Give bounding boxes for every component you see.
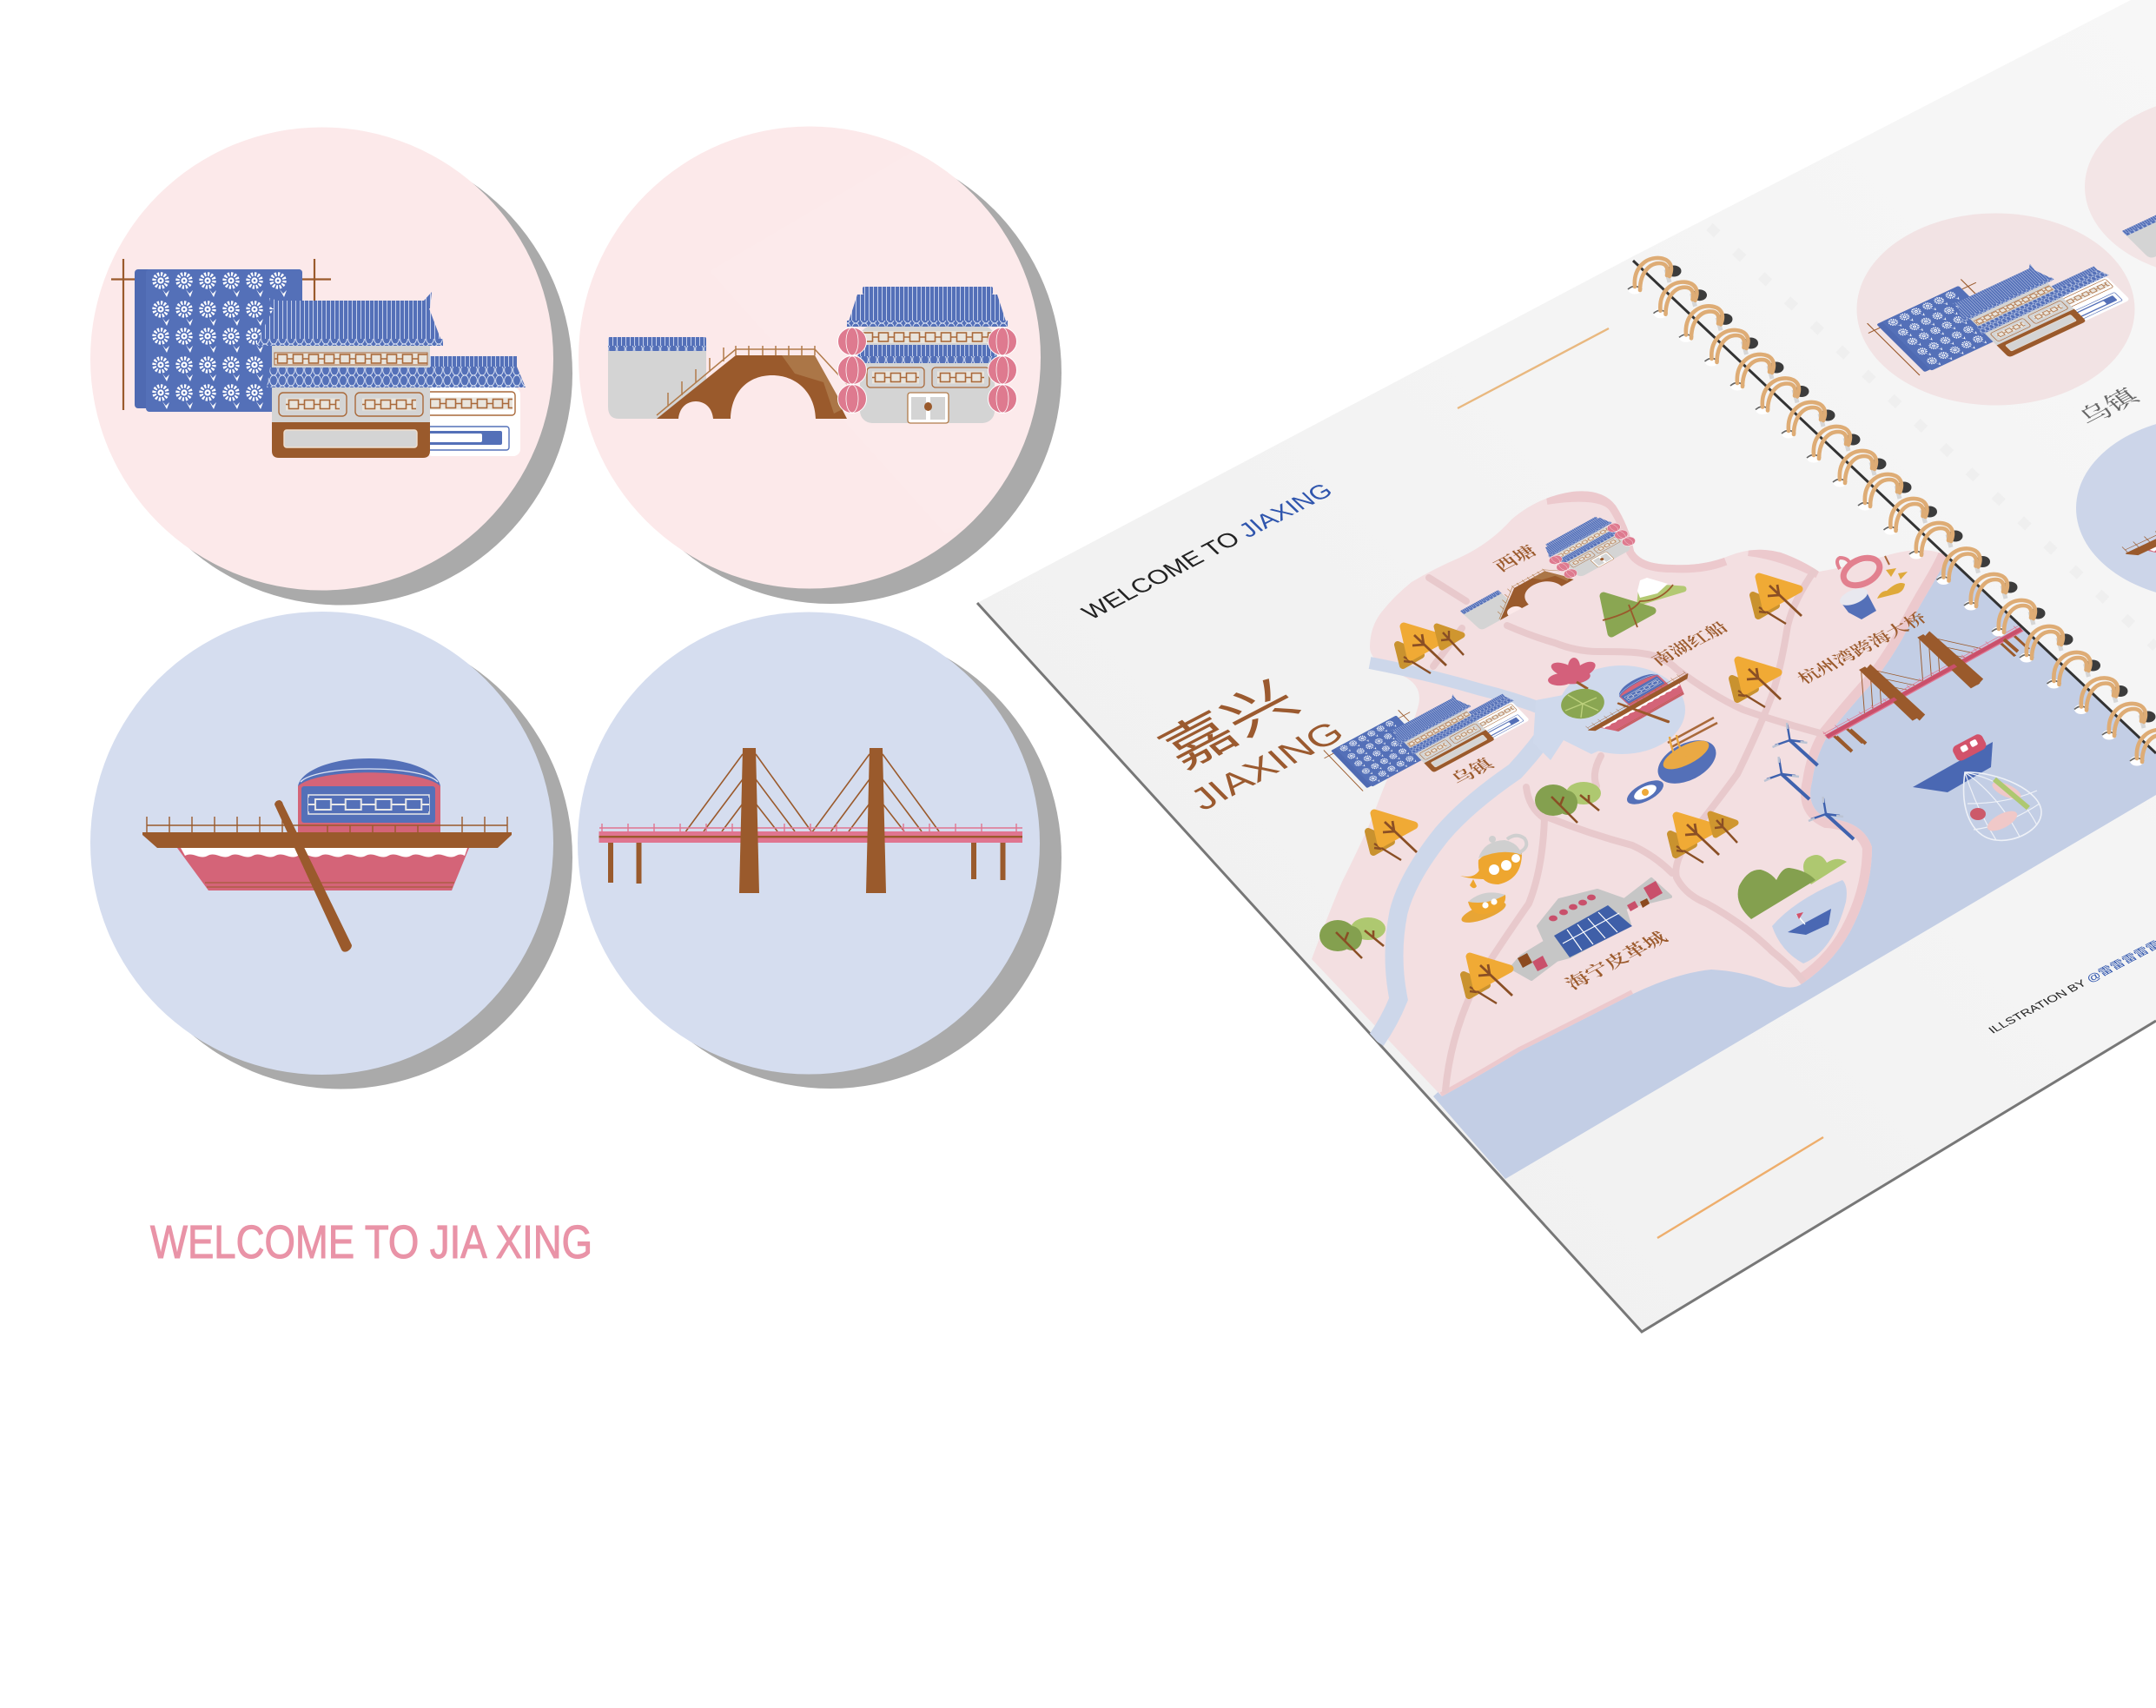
page disc pink 2 xyxy=(2085,106,2156,268)
heading: Jiaxing latin: JIAXING xyxy=(1181,715,1352,817)
icon: spade and sand xyxy=(1877,556,1908,599)
page disc pink xyxy=(1857,214,2135,405)
orange rule top xyxy=(1458,328,1609,408)
icon: cable-stayed bridge xyxy=(599,748,1022,893)
coaster shadow xyxy=(109,142,572,605)
page disc blue xyxy=(2076,416,2156,600)
label: Hangzhou Bay bridge: 杭州湾跨海大桥 xyxy=(1794,609,1931,687)
icon: fried egg plate xyxy=(1627,780,1663,804)
binding spine xyxy=(1633,261,2156,753)
roads xyxy=(1429,569,1827,1090)
icon: red boat xyxy=(142,758,512,952)
coast bands xyxy=(1442,494,1948,1096)
icon: sailboat xyxy=(1788,909,1831,935)
icon: Xitang map illustration xyxy=(1460,516,1636,629)
coaster: Nanhu red boat xyxy=(90,612,572,1089)
sea xyxy=(1433,556,2156,1179)
spiral binding xyxy=(1628,258,2156,792)
icon: teacup xyxy=(1461,879,1506,923)
icon: bridge map illustration xyxy=(1822,626,2030,751)
coaster disc xyxy=(579,127,1041,589)
icon: Wuzhen cloth and buildings xyxy=(111,259,526,458)
rivers and lake xyxy=(1370,663,1685,1041)
binding rings xyxy=(1628,258,2156,792)
heading: Jiaxing in Chinese: 嘉兴 xyxy=(1147,672,1312,778)
light reflection xyxy=(710,148,1068,533)
south lake xyxy=(1772,880,1847,963)
right page: Wuzhen circle xyxy=(1857,96,2156,600)
icon: bucket xyxy=(1840,589,1876,619)
mini Wuzhen illustration xyxy=(1862,231,2133,394)
trees: autumn xyxy=(1368,577,1802,1003)
icon: Xitang house, bridge and lanterns xyxy=(608,287,1016,423)
land xyxy=(1312,491,1948,1096)
icon: zongzi xyxy=(1603,578,1683,633)
icon: swim ring and flamingo xyxy=(1835,554,1883,589)
orange rule bottom xyxy=(1657,1137,1823,1238)
icon: teapot xyxy=(1460,836,1526,884)
icon: green hills xyxy=(1738,855,1847,919)
icon: fishing net with catch xyxy=(1964,772,2041,840)
label: Haining leather city: 海宁皮革城 xyxy=(1562,929,1671,993)
icon: Haining leather city xyxy=(1511,879,1670,979)
label: Xitang: 西塘 xyxy=(1490,542,1541,575)
bridge: thick towers and deck xyxy=(1827,629,2021,751)
ring imprints xyxy=(1710,227,2156,647)
icon: noodle bowl xyxy=(1657,716,1718,784)
paper edge xyxy=(977,603,2156,1332)
icon: Wuzhen map illustration xyxy=(1319,665,1532,806)
icon: fishing boat xyxy=(1913,732,1993,792)
coaster shadow xyxy=(109,626,572,1089)
paper sheet xyxy=(977,0,2156,1332)
icon: lotus xyxy=(1547,658,1606,721)
coaster: Wuzhen xyxy=(90,127,572,605)
caption: WELCOME TO JIA XING xyxy=(150,1216,592,1268)
coaster shadow xyxy=(599,626,1061,1089)
icon: map boat xyxy=(1585,671,1689,732)
mini Xitang illustration xyxy=(2122,215,2156,257)
label: Wuzhen: 乌镇 xyxy=(2073,382,2146,430)
label: Wuzhen: 乌镇 xyxy=(1447,754,1499,788)
label: Nanhu red boat: 南湖红船 xyxy=(1648,619,1732,669)
coaster: Hangzhou Bay bridge xyxy=(578,612,1061,1089)
coaster: Xitang xyxy=(579,127,1068,604)
map xyxy=(1312,491,2156,1179)
coaster disc xyxy=(578,612,1040,1074)
coaster shadow xyxy=(599,142,1061,604)
coaster disc xyxy=(90,127,553,591)
icon: wind turbines xyxy=(1764,723,1854,839)
mini boat illustration xyxy=(2121,531,2156,556)
notebook xyxy=(977,0,2156,1332)
coaster disc xyxy=(90,612,553,1075)
heading: welcome: WELCOME TO JIAXING xyxy=(1076,479,1339,624)
trees: green xyxy=(1319,782,1601,958)
